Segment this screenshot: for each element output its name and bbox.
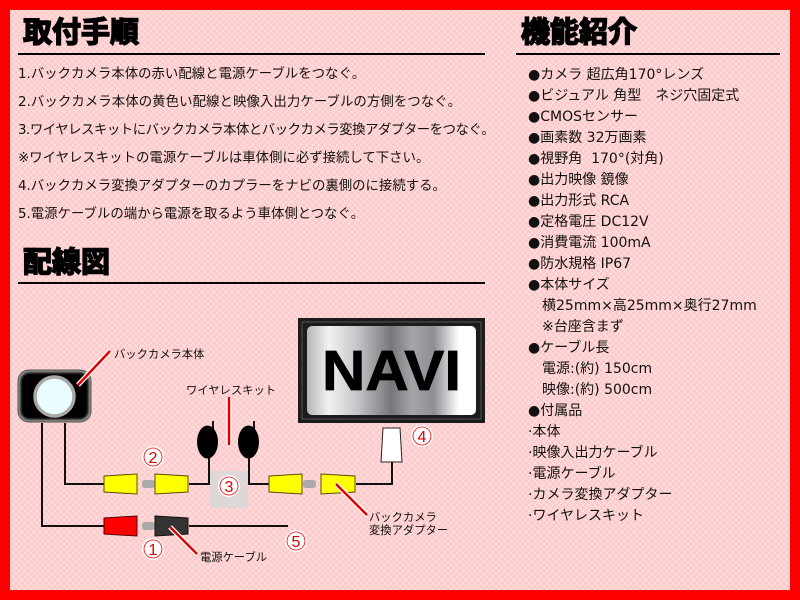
marker: 2: 2 [149, 450, 158, 467]
text block: feature list: ·本体 [528, 424, 560, 440]
marker: 5 [285, 530, 307, 552]
marker: 1 [142, 538, 164, 560]
label: power cable [170, 527, 267, 564]
heading: installation steps: 取付手順 [23, 17, 139, 49]
icon: yellow connectors [104, 474, 355, 494]
marker: 3 [218, 475, 240, 497]
text block: feature list: ●カメラ 超広角170°レンズ [528, 67, 704, 83]
label: back camera adapter: バックカメラ [369, 511, 437, 524]
icon: NAVI screen [298, 318, 485, 423]
icon: wireless antennas [197, 426, 259, 458]
text block: feature list: ※台座含まず [542, 319, 624, 335]
marker: 5: 5 [292, 534, 301, 551]
marker: 2 [142, 446, 164, 468]
text block: installation steps: ※ワイヤレスキットの電源ケーブルは車体側に必ず接続して下さい。 [18, 151, 429, 166]
text block: feature list: ●出力形式 RCA [528, 193, 629, 209]
label: power cable: 電源ケーブル [200, 550, 267, 564]
text block: feature list: ●視野角 170°(対角) [528, 151, 664, 167]
marker: 1: 1 [149, 542, 158, 559]
label: wireless kit: ワイヤレスキット [186, 385, 276, 397]
icon: red connector [104, 516, 137, 536]
label: back camera body [78, 347, 204, 385]
marker: 3: 3 [225, 479, 234, 496]
heading: wiring diagram: 配線図 [23, 247, 110, 279]
text block: feature list: ●消費電流 100mA [528, 235, 651, 251]
text block: feature list: ●ケーブル長 [528, 340, 609, 356]
icon: back camera [18, 370, 91, 422]
icon: NAVI screen: NAVI [322, 339, 461, 403]
icon: wireless kit box [210, 471, 248, 508]
text block: installation steps: 4.バックカメラ変換アダプターのカプラーをナビの裏側のに接続する。 [18, 179, 446, 194]
cables [42, 421, 392, 526]
text block: installation steps [18, 66, 494, 222]
text block: feature list: ●定格電圧 DC12V [528, 214, 649, 230]
text block: installation steps: 2.バックカメラ本体の黄色い配線と映像入出力ケーブルの方側をつなぐ。 [18, 95, 461, 110]
text block: feature list: ●出力映像 鏡像 [528, 172, 629, 188]
text block: feature list: ●付属品 [528, 403, 582, 419]
text block: feature list: ●本体サイズ [528, 277, 610, 293]
text block: feature list: ·映像入出力ケーブル [528, 445, 658, 461]
connector pins [142, 480, 316, 530]
text block: feature list: ●CMOSセンサー [528, 109, 638, 125]
text block: feature list: 横25mm×高25mm×奥行27mm [542, 298, 757, 314]
label: back camera body: バックカメラ本体 [114, 347, 204, 361]
icon: black power connector [155, 516, 188, 536]
marker: 4: 4 [418, 429, 427, 446]
icon: white navi plug [381, 428, 402, 462]
text block: feature list: ●ビジュアル 角型 ネジ穴固定式 [528, 88, 739, 104]
text block: installation steps: 1.バックカメラ本体の赤い配線と電源ケーブルをつなぐ。 [18, 67, 365, 82]
label: wireless kit [186, 385, 276, 445]
label: back camera adapter [336, 484, 448, 537]
marker: 4 [411, 425, 433, 447]
text block: feature list: ●防水規格 IP67 [528, 256, 631, 272]
text block: feature list: ·電源ケーブル [528, 466, 616, 482]
text block: installation steps: 3.ワイヤレスキットにバックカメラ本体とバックカメラ変換アダプターをつなぐ。 [18, 123, 494, 138]
text block: feature list: ●画素数 32万画素 [528, 130, 646, 146]
text block: feature list [528, 66, 757, 524]
heading: features: 機能紹介 [521, 17, 637, 49]
text block: feature list: ·ワイヤレスキット [528, 508, 644, 524]
text block: feature list: 電源:(約) 150cm [542, 361, 652, 377]
text block: installation steps: 5.電源ケーブルの端から電源を取るよう車体側とつなぐ。 [18, 207, 364, 222]
text block: feature list: 映像:(約) 500cm [542, 382, 652, 398]
text block: feature list: ·カメラ変換アダプター [528, 487, 672, 503]
label: back camera adapter: 変換アダプター [369, 523, 448, 537]
